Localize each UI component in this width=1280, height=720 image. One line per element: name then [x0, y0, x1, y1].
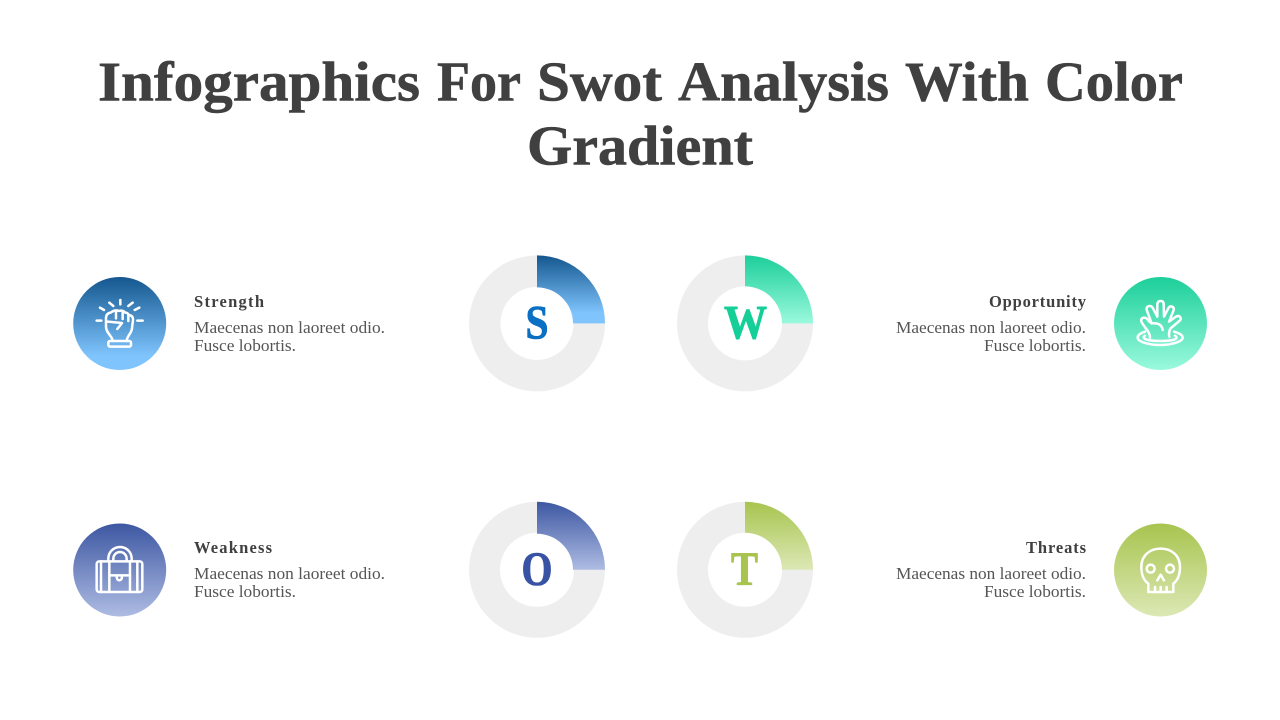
- chart: W donut: [677, 255, 813, 391]
- text: opportunity: [896, 292, 1087, 355]
- text: strength: Maecenas non laoreet odio.: [194, 318, 385, 337]
- text: strength: [194, 292, 385, 355]
- chart: T donut: T: [731, 543, 758, 596]
- chart: T donut: [677, 502, 813, 638]
- chart: O donut: O: [522, 543, 552, 596]
- icon: briefcase: [97, 547, 142, 592]
- title: Swot: [537, 52, 662, 114]
- text: weakness: Maecenas non laoreet odio.: [194, 564, 385, 583]
- text: weakness: [194, 538, 385, 601]
- title: Gradient: [527, 116, 753, 178]
- title: Analysis: [678, 52, 889, 114]
- icon: skull: [1141, 549, 1180, 592]
- panel: threats icon: [1114, 524, 1207, 616]
- text: threats: Threats: [1026, 538, 1087, 557]
- icon: fist: [97, 300, 143, 347]
- panel: strength icon: [73, 277, 166, 370]
- panel: opportunity icon: [1114, 277, 1207, 370]
- text: strength: Fusce lobortis.: [194, 336, 296, 355]
- text: threats: Maecenas non laoreet odio.: [896, 564, 1086, 583]
- title: Color: [1045, 52, 1183, 114]
- chart: S donut: [469, 255, 605, 391]
- text: threats: [896, 538, 1087, 601]
- text: weakness: Fusce lobortis.: [194, 582, 296, 601]
- title: [98, 52, 1183, 178]
- text: opportunity: Opportunity: [989, 292, 1087, 311]
- panel: weakness icon: [73, 524, 166, 616]
- text: opportunity: Fusce lobortis.: [984, 336, 1086, 355]
- text: threats: Fusce lobortis.: [984, 582, 1086, 601]
- text: opportunity: Maecenas non laoreet odio.: [896, 318, 1086, 337]
- icon: hand: [1138, 301, 1183, 345]
- title: For: [437, 52, 521, 114]
- text: strength: Strength: [194, 292, 264, 311]
- chart: S donut: S: [526, 296, 548, 350]
- chart: O donut: [469, 502, 605, 638]
- text: weakness: Weakness: [194, 538, 273, 557]
- title: With: [905, 52, 1029, 114]
- chart: W donut: W: [724, 296, 767, 350]
- title: Infographics: [98, 52, 420, 114]
